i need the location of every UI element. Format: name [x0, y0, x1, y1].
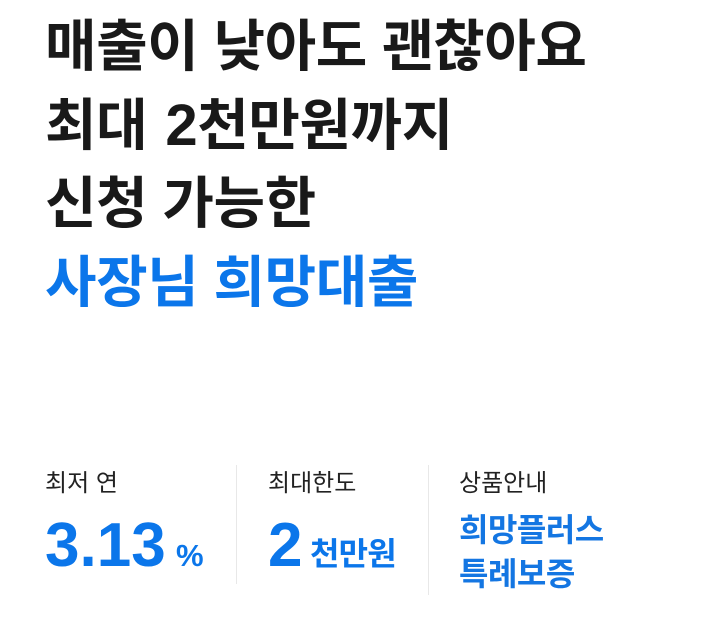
limit label: 최대한도 — [268, 470, 356, 497]
rate value: 3.13 — [45, 511, 166, 580]
product label: 상품안내 — [459, 470, 547, 497]
rate label: 최저 연 — [45, 470, 118, 497]
stat: maximum limit — [268, 470, 396, 580]
product name: 특례보증 — [459, 556, 575, 592]
title line 3: 신청 가능한 — [45, 172, 316, 235]
title highlighted line: 사장님 희망대출 — [45, 251, 418, 314]
title line 1: 매출이 낮아도 괜찮아요 — [45, 15, 587, 78]
title — [45, 15, 587, 314]
product name: 희망플러스 — [459, 512, 604, 548]
divider — [428, 465, 429, 595]
rate unit: % — [176, 538, 204, 573]
divider — [236, 465, 237, 584]
stat: lowest rate — [45, 470, 204, 580]
limit value: 2 — [268, 511, 302, 580]
limit unit: 천만원 — [310, 536, 396, 572]
product name — [459, 512, 604, 592]
title line 2: 최대 2천만원까지 — [45, 93, 453, 158]
stat: product info — [459, 470, 604, 592]
